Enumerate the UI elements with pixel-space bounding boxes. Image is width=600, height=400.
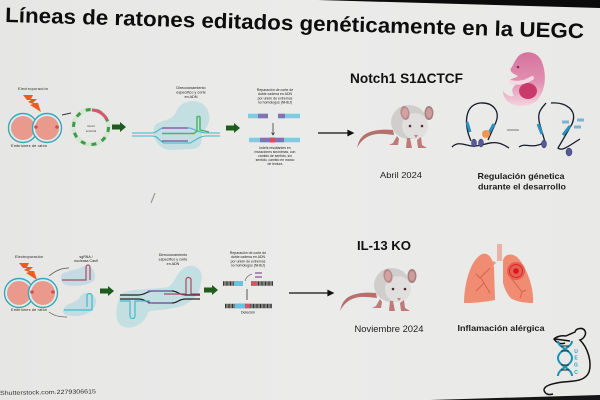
DNA strands xyxy=(132,128,220,143)
repaired DNA xyxy=(249,138,300,142)
repair label: por unión de extremos xyxy=(258,96,293,100)
deletion label: Deleción xyxy=(241,310,255,314)
arrow: green step 2 xyxy=(204,285,218,295)
label: allergic inflammation: Inflamación alérgica xyxy=(458,323,545,333)
inset: sgRNA top xyxy=(61,266,95,286)
targeting label: Direccionamiento xyxy=(159,253,187,257)
logo letters: C xyxy=(574,370,578,376)
credit: shutterstock: Shutterstock.com.2279306615 xyxy=(0,389,97,397)
heading: IL-13 KO: IL-13 KO xyxy=(357,238,411,253)
icon: mouse embryos xyxy=(4,278,58,308)
mouse outline xyxy=(544,328,590,395)
cut strand xyxy=(223,281,273,286)
logo letters: U xyxy=(574,349,578,355)
label: regulation: durante el desarrollo xyxy=(478,182,566,192)
electroporation label: Electroporación xyxy=(18,87,48,91)
repair label: por unión de extremos xyxy=(231,259,266,263)
cut DNA ends xyxy=(258,114,285,118)
arrow: plasmid to embryo xyxy=(62,113,71,115)
arrow: repair xyxy=(272,123,274,135)
blob background xyxy=(116,266,202,328)
guide RNA xyxy=(162,116,209,134)
targeting label: específico y corte xyxy=(176,90,206,94)
repaired strand xyxy=(225,304,272,308)
sgRNA cyan xyxy=(64,294,92,310)
icon: mouse Abril xyxy=(357,105,434,148)
indel note: sentido, cambio en marco xyxy=(256,158,295,162)
icon: mouse Noviembre xyxy=(340,268,416,311)
arrow: green step 2 xyxy=(226,123,240,133)
purple guides xyxy=(162,128,188,141)
inset: sgRNA bottom xyxy=(63,293,96,316)
repaired end red xyxy=(245,304,250,308)
cut end red xyxy=(251,281,257,286)
excised fragment xyxy=(255,273,262,277)
repair label: no homólogos (NHEJ) xyxy=(231,264,265,268)
step: DNA targeting xyxy=(116,253,202,328)
arrow: green step 1 xyxy=(112,122,126,132)
targeting label: específico y corte xyxy=(159,258,187,262)
panel: IL-13 workflow xyxy=(4,251,333,328)
icon: plasmid: lentiviral xyxy=(86,129,97,133)
icon: mouse embryos xyxy=(8,114,62,142)
icon: lightning bolt xyxy=(23,95,41,112)
indel note: mutaciones sinónimas, con xyxy=(255,150,296,154)
screen edge bottom xyxy=(430,395,600,400)
arrow: repair xyxy=(246,289,248,300)
date: Abril 2024: Abril 2024 xyxy=(380,170,422,180)
cut ends xyxy=(234,281,243,286)
mutation xyxy=(270,138,275,142)
guide top xyxy=(164,278,200,294)
DNA strands xyxy=(120,291,200,303)
icon: plasmid xyxy=(74,110,108,144)
electroporation label: Electroporación xyxy=(15,255,43,259)
step: electroporation xyxy=(4,255,98,317)
mouse snout xyxy=(554,336,570,344)
date: Noviembre 2024: Noviembre 2024 xyxy=(354,324,424,334)
repair label: Reparación de corte de xyxy=(257,88,293,92)
cut DNA xyxy=(248,114,300,118)
logo: UEGC mouse and DNA xyxy=(544,328,590,395)
step: electroporation xyxy=(8,87,62,148)
logo letters: G xyxy=(574,362,578,368)
targeting label: en ADN xyxy=(167,262,180,266)
insertion mark xyxy=(260,138,284,142)
indel note: cambio de sentido, sin xyxy=(258,154,292,158)
targeting label: en ADN xyxy=(184,95,198,99)
icon: lungs xyxy=(464,244,533,303)
repair label: no homólogos (NHEJ) xyxy=(258,101,292,105)
sgRNA label: sgRNA / xyxy=(79,255,93,259)
targeting label: Direccionamiento xyxy=(176,86,206,90)
repaired ends xyxy=(235,304,245,308)
arrow: to mouse xyxy=(318,130,353,136)
sgRNA red xyxy=(62,265,90,280)
repair label: doble cadena en ADN xyxy=(231,255,265,259)
indel note: Indels resultantes en xyxy=(259,146,291,150)
step: NHEJ repair xyxy=(248,88,300,166)
icon: lightning bolt xyxy=(19,263,37,280)
target region xyxy=(148,291,172,303)
sgRNA label: nucleasa Cas9 xyxy=(74,259,98,263)
heading: Notch1: Notch1 S1ΔCTCF xyxy=(350,71,463,86)
repair label: Reparación de corte de xyxy=(230,251,266,255)
DNA rungs xyxy=(561,346,569,370)
arrow: green step 1 xyxy=(100,286,114,296)
arrow: sgRNA to embryo xyxy=(49,268,69,317)
blob background xyxy=(153,101,209,150)
DNA helix xyxy=(558,341,572,376)
screen edge top xyxy=(318,0,600,8)
embryo label: Embriones de ratón xyxy=(11,308,47,312)
label: regulation: Regulación génetica xyxy=(478,171,565,181)
embryo label: Embriones de ratón xyxy=(11,144,47,148)
title: Líneas de ratones editados genéticamente en la UEGC xyxy=(5,4,584,43)
guide bottom xyxy=(120,301,150,318)
step: DNA targeting xyxy=(132,86,220,150)
stray mark xyxy=(151,193,155,203)
logo letters: E xyxy=(574,356,578,362)
repair label: doble cadena en ADN xyxy=(258,92,292,96)
icon: plasmid: Vector xyxy=(87,124,95,128)
step: deletion repair xyxy=(223,251,273,314)
arrow: excision xyxy=(245,274,252,281)
panel: Notch1 workflow xyxy=(8,86,353,166)
diagram: chromatin regulation xyxy=(452,103,584,156)
indel note: de lectura xyxy=(268,162,283,166)
icon: embryo xyxy=(503,52,545,106)
arrow: to mouse xyxy=(289,290,333,296)
